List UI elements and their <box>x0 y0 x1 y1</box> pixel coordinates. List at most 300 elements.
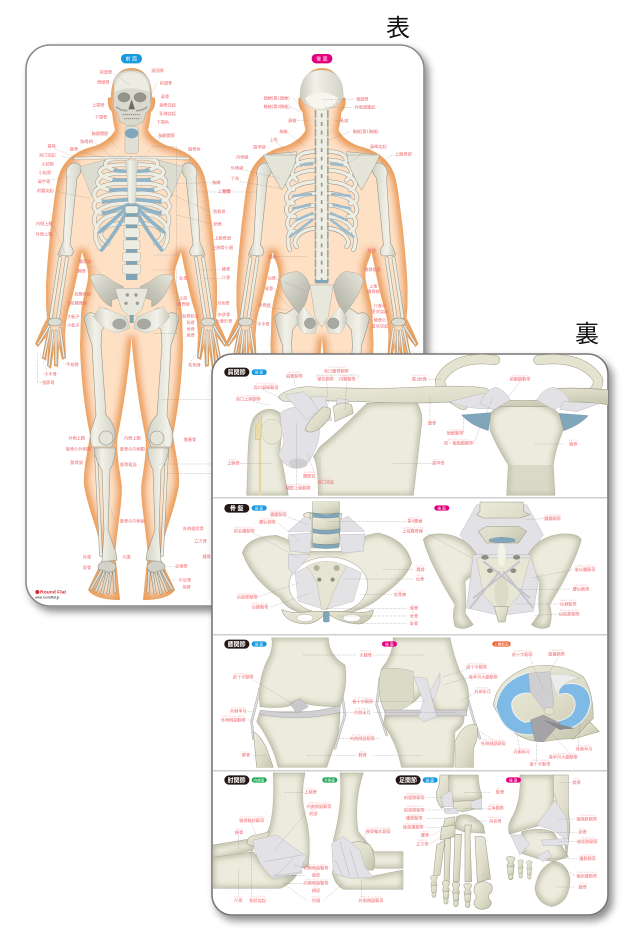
labels: pelvis: だいよんようつい <box>408 515 422 519</box>
label group: anterior view: 乳様突起 <box>159 110 177 116</box>
labels: knee: ひこつ <box>243 749 249 753</box>
label group: anterior view: 大菱形骨 <box>216 318 232 324</box>
heading: 足関節 with badges <box>396 775 521 785</box>
label group: anterior view: 橈骨 <box>222 265 230 271</box>
label group: anterior view: 上前 <box>179 295 187 301</box>
illustration: tibial plateau top view <box>493 665 599 742</box>
labels: pelvis: ちこつ <box>411 618 417 622</box>
labels: knee: だいたいこつ <box>360 649 371 653</box>
labels: knee: こうはんげつだいたいじんたい <box>550 751 576 755</box>
labels: shoulder: 円錐靭帯 <box>339 376 356 382</box>
heading: 肘関節 with badges: 外側面 <box>324 777 335 782</box>
illustration: clavicle <box>278 386 610 407</box>
labels: knee: ないそくはんげつ <box>355 707 370 711</box>
label group: anterior view: 胸鎖関節 <box>158 132 175 138</box>
labels: pelvis: せんきょくじんたい <box>560 598 577 602</box>
heading: back side 裏: 裏 <box>575 321 599 348</box>
label group: anterior view: 大転子 <box>67 313 80 319</box>
illustration: sternum and first ribs <box>440 359 598 496</box>
label group: anterior view: 前腸骨棘 <box>74 290 92 296</box>
labels: pelvis: 腸骨 <box>416 566 425 572</box>
labels: knee: ぜんじゅうじじんたい <box>234 671 253 675</box>
labels: elbow and ankle: 腓骨 <box>572 779 581 785</box>
logo: Round Flat: Round Flat <box>40 590 66 596</box>
labels: elbow and ankle: しょうひじんたい <box>580 853 595 857</box>
heading: front side 表: 表 <box>386 15 410 42</box>
labels: knee: ぜんじゅうじじんたい <box>467 661 486 665</box>
labels: elbow and ankle: ごきょしょうじんたい <box>404 821 423 825</box>
label group: anterior view: 肋骨 <box>213 221 222 227</box>
labels: shoulder: 関節上腕靭帯 <box>286 485 311 491</box>
labels: knee: 前十字靭帯 <box>466 664 487 670</box>
heading: 骨盤 with badges <box>224 504 449 513</box>
labels: pelvis: 仙結節靭帯 <box>559 610 580 616</box>
heading: 骨盤 with badges: 骨 盤 <box>230 504 243 512</box>
labels: pelvis: こうせんちょうじんたい <box>575 564 595 568</box>
labels: elbow and ankle: 橈骨輪状靭帯 <box>366 828 391 834</box>
labels: shoulder: けんこうこつ <box>433 457 444 461</box>
heading: 肘関節 with badges: 肘関節 <box>228 776 246 784</box>
label group: anterior view: 頬骨突起 <box>159 102 177 108</box>
skeleton: posterior limbs <box>227 162 417 354</box>
labels: knee: がいそくそくふくじんたい <box>482 738 504 742</box>
labels: knee: 後半月大腿靭帯 <box>549 754 578 760</box>
labels: pelvis: 尾骨 <box>410 605 418 611</box>
label group: anterior view: 下前腸骨棘 <box>66 300 88 306</box>
labels: shoulder: うこうさこつじんたい <box>327 365 346 369</box>
labels: elbow and ankle: しょうこつ <box>578 881 587 885</box>
labels: elbow and ankle: 橈骨輪状靭帯 <box>239 817 264 823</box>
labels: knee: こうじゅうじじんたい <box>354 696 372 700</box>
label group: lower legs and logo: 脛骨粗面 <box>120 461 137 467</box>
label group: posterior view: 軸椎(第2頚椎) <box>264 103 290 109</box>
label group: anterior view: 下顎角 <box>156 119 169 125</box>
label group: lower legs and logo: 手根骨 <box>66 361 79 367</box>
labels: shoulder: 烏口鎖骨靭帯 <box>324 367 349 373</box>
labels: pelvis <box>234 509 595 626</box>
label group: posterior view: 尾骨 <box>265 285 273 291</box>
labels: pelvis: 後仙腸靭帯 <box>575 566 595 572</box>
heading: 肘関節 with badges <box>224 775 337 785</box>
label group: posterior view: 胸椎 <box>279 128 288 134</box>
label group: posterior view: 乳突 <box>340 117 348 123</box>
label group: anterior view: 下顎骨 <box>95 114 107 120</box>
heading: 肘関節 with badges: 内側面 <box>254 777 265 782</box>
label group: posterior view: 頚椎(第1頚椎) <box>264 94 290 100</box>
label group: posterior view: 茎状突起 <box>372 308 389 314</box>
labels: pelvis: ぜんせんちょうじんたい <box>234 525 255 529</box>
panel: knee joint <box>221 638 599 768</box>
heading: 肩関節 with badge: 肩関節 <box>228 368 246 376</box>
labels: shoulder: えんすいじんたい <box>340 373 355 377</box>
label group: anterior view: 小転子 <box>67 321 80 327</box>
label group: anterior view: 烏口突起 <box>39 151 56 157</box>
label group: anterior view: 胸骨 <box>212 179 221 185</box>
labels: elbow and ankle: 踵腓靭帯 <box>406 815 423 821</box>
labels: elbow and ankle: ぜんぶ <box>311 808 316 812</box>
label group: lower legs and logo: 外果 <box>83 553 91 559</box>
illustration: knee posterior <box>377 638 480 768</box>
labels: elbow and ankle: 後距踵靭帯 <box>576 872 597 878</box>
label group: anterior view: 舟状骨 <box>218 311 230 317</box>
labels: elbow and ankle: 前距腓靭帯 <box>404 806 425 812</box>
label group: anterior view: 上腕骨 <box>218 187 230 193</box>
labels: pelvis: ちょうこつ <box>416 564 425 568</box>
label group: posterior view: 肘頭 <box>367 247 377 253</box>
labels: shoulder: ぜんこうきょうさじんたい <box>448 437 470 441</box>
labels: pelvis: せんけっせつじんたい <box>238 591 257 595</box>
labels: pelvis: 腸腰靭帯 <box>270 511 287 517</box>
labels: elbow and ankle: 後脛腓靭帯 <box>576 815 597 821</box>
labels: knee: 内側半月 <box>513 749 530 755</box>
labels: knee: 後十字靭帯 <box>352 698 373 704</box>
labels: shoulder: 菱形靭帯 <box>317 376 334 382</box>
label group: anterior view: 腸骨棘 <box>177 300 190 306</box>
label group: anterior view: 鼻骨 <box>161 93 169 99</box>
label group: posterior view: 頭椎 <box>288 117 296 123</box>
labels: shoulder: ろくさじんたい <box>449 427 462 431</box>
labels: elbow and ankle: ないそくそくふくじんたい <box>305 877 327 881</box>
label group: anterior view: 腸骨 <box>77 267 86 273</box>
illustration: elbow lateral <box>332 773 403 889</box>
labels: elbow and ankle: こうけいひじんたい <box>578 813 595 817</box>
label group: posterior view: 尺骨の <box>374 302 386 308</box>
label group: anterior view: 坐骨 <box>186 326 195 332</box>
label group: posterior view <box>223 54 412 328</box>
labels: knee: 外側半月 <box>474 688 491 694</box>
labels: elbow and ankle: 前部 <box>309 810 317 816</box>
labels: pelvis: ちょうようじんたい <box>270 509 287 513</box>
illustration: knee anterior <box>252 638 346 768</box>
labels: knee: がいそくそくふくじんたい <box>222 714 244 718</box>
labels: elbow and ankle <box>234 777 598 903</box>
labels: elbow and ankle: こうぶ <box>313 869 319 873</box>
label group: posterior view: 仙骨 <box>267 275 276 281</box>
labels: pelvis: 仙結節靭帯 <box>237 594 258 600</box>
heading: 骨盤 with badges: 前 面 <box>255 505 264 510</box>
labels: knee: 内側側副靭帯 <box>350 735 375 741</box>
labels: elbow and ankle: ちゅうとう <box>311 895 321 899</box>
labels: knee: しつがいじんたい <box>549 648 564 652</box>
label group: lower legs and logo: 脛骨の内側顆 <box>120 446 146 452</box>
labels: elbow and ankle: 上腕骨 <box>304 789 317 795</box>
logo: Round Flat <box>35 590 66 599</box>
labels: elbow and ankle: きょこつ <box>579 826 586 830</box>
labels: knee: 後半月大腿靭帯 <box>469 674 498 680</box>
labels: knee: 膝蓋靭帯 <box>548 650 565 656</box>
heading: 骨盤 with badges: 後 面 <box>437 505 446 510</box>
labels: elbow and ankle: 後距踵靭帯 <box>403 824 424 830</box>
label group: lower legs and logo: 踵骨 <box>202 553 211 559</box>
labels: shoulder: ぜんきょうさじんたい <box>511 373 529 377</box>
labels: elbow and ankle: 内側側副靭帯 <box>307 803 331 809</box>
labels: elbow and ankle: 橈骨 <box>235 829 243 835</box>
label group: lower legs and logo: 外側上顆 <box>68 435 86 441</box>
label group: anterior view: 前鋸突起 <box>37 187 54 193</box>
labels: knee: 脛骨 <box>358 752 367 758</box>
labels: knee: 内側半月 <box>354 709 371 715</box>
label group: anterior view: 胸鎖関節 <box>92 130 108 136</box>
labels: pelvis: 腰仙靭帯 <box>259 519 276 525</box>
labels: elbow and ankle: 距骨 <box>578 829 587 835</box>
labels: pelvis: 第4腰椎 <box>408 518 422 524</box>
label group: anterior view: 肋軟骨 <box>213 208 226 214</box>
label group: anterior view: 外側上顆 <box>36 230 53 236</box>
view badge: 前面: 前 面 <box>126 55 137 62</box>
labels: elbow and ankle: 横部 <box>312 887 320 893</box>
labels: knee: 後十字靭帯 <box>530 760 550 766</box>
labels: shoulder: うこうとっき <box>321 476 332 480</box>
labels: elbow and ankle: がいそくそくふくじんたい <box>360 895 382 899</box>
label group: posterior view: 上角 <box>269 136 278 142</box>
label group: posterior view: 腰椎 <box>268 254 277 260</box>
labels: elbow and ankle: けいこつ <box>496 786 504 790</box>
label group: anterior view: 腸骨稜 <box>79 258 92 264</box>
labels: pelvis: せんきょくじんたい <box>252 601 268 605</box>
label group: lower legs and logo: 中手骨 <box>44 370 57 376</box>
labels: elbow and ankle: こうじょうとっき <box>250 895 265 899</box>
labels: pelvis: 仙骨 <box>416 575 424 581</box>
label group: lower legs and logo: 腓骨頭 <box>70 459 84 465</box>
labels: pelvis: 仙棘靭帯 <box>252 604 268 610</box>
label group: anterior view <box>36 54 234 337</box>
divider: knee / elbow <box>213 770 607 772</box>
label group: lower legs and logo: 有鉤骨 <box>188 362 201 368</box>
illustration: pelvis anterior <box>242 501 412 624</box>
labels: pelvis: 恥骨 <box>410 620 418 626</box>
panel: front sheet card <box>26 45 424 606</box>
label group: posterior view: 上腕骨頭 <box>395 151 412 157</box>
skeleton: anterior torso and skull <box>75 70 188 333</box>
heading: 膝関節 with badges <box>224 640 511 649</box>
label group: lower legs and logo: 内果 <box>122 553 131 559</box>
labels: knee: こうはんげつだいたいじんたい <box>471 671 496 675</box>
label group: posterior view: 内側縁 <box>236 154 249 160</box>
skeleton: anterior limbs <box>38 163 225 593</box>
labels: pelvis: 坐骨棘 <box>394 591 407 597</box>
label group: anterior view: 内側上顆 <box>36 220 53 226</box>
panel: shoulder joint <box>224 359 610 496</box>
labels: shoulder: 胸骨 <box>569 440 577 446</box>
label group: posterior view: 肩甲棘 <box>253 143 266 149</box>
illustration: ligaments <box>285 387 600 432</box>
label group: lower legs and logo: 脛骨の外側顆 <box>66 446 92 452</box>
labels: elbow and ankle: 脛骨 <box>496 789 504 795</box>
label group: anterior view: 仙骨 <box>179 275 187 281</box>
labels: elbow and ankle: 内側側副靭帯 <box>304 880 328 886</box>
label group: anterior view: 胸骨柄 <box>80 138 93 144</box>
label group: anterior view: 月状骨 <box>217 300 230 306</box>
logo: Round Flat: www.roundflat.jp <box>35 595 60 599</box>
label group: posterior view: 橈骨の <box>374 317 386 323</box>
labels: elbow and ankle: ないそくそくふくじんたい <box>308 801 330 805</box>
label group: anterior view: 小結節 <box>39 169 51 175</box>
label group: posterior view: 中手骨 <box>257 320 270 326</box>
labels: knee: がいそくはんげつ <box>577 743 591 747</box>
labels: pelvis: じょうぜんちょうこつきょく <box>401 525 425 529</box>
labels: elbow and ankle: 外側側副靭帯 <box>359 897 383 903</box>
view badge: 前面 <box>121 54 142 63</box>
labels: shoulder: 烏口突起 <box>318 479 335 485</box>
label group: anterior view: 肩峰 <box>47 142 57 148</box>
labels: shoulder: りょうけいじんたい <box>317 373 334 377</box>
label group: lower legs and logo: 中足骨 <box>179 576 191 582</box>
label group: lower legs and logo: 立方骨 <box>194 537 207 543</box>
labels: elbow and ankle: 三角靭帯 <box>487 805 504 811</box>
labels: shoulder: 前・後胸鎖靭帯 <box>444 440 473 446</box>
label group: lower legs and logo: 指節骨 <box>42 379 55 385</box>
label group: posterior view: 胸椎(第1胸椎) <box>353 128 379 134</box>
heading: 肩関節 with badge: 前 面 <box>255 369 264 374</box>
labels: shoulder <box>227 365 578 491</box>
labels: knee: 外側側副靭帯 <box>481 740 506 746</box>
skin silhouette: anterior body <box>35 68 228 600</box>
labels: knee: がいそくはんげつ <box>231 705 246 709</box>
labels: shoulder: 関節包 <box>303 472 316 478</box>
labels: knee: 外側半月 <box>230 708 247 714</box>
view badge: 後面: 後 面 <box>316 55 328 62</box>
illustration: foot dorsal <box>431 775 492 909</box>
labels: shoulder: うこうけんぽうじんたい <box>256 382 276 386</box>
labels: elbow and ankle: 肘頭 <box>312 897 321 903</box>
labels: elbow and ankle: 前脛腓靭帯 <box>404 794 425 800</box>
labels: pelvis: ちょうようじんたい <box>544 513 561 517</box>
illustration: foot posterior <box>507 775 570 907</box>
label group: anterior view: 上顎骨 <box>92 101 105 107</box>
view badge: 後面 <box>312 54 332 63</box>
labels: knee: 外側側副靭帯 <box>221 716 246 722</box>
label group: anterior view: 胸骨体 <box>188 146 201 152</box>
labels: knee: ないそくそくふくじんたい <box>351 733 373 737</box>
labels: pelvis: 上前腸骨棘 <box>402 528 424 534</box>
labels: pelvis: ようせんじんたい <box>574 583 588 587</box>
labels: knee: ないそくはんげつ <box>514 746 529 750</box>
label group: anterior view: 前頭骨 <box>160 80 172 86</box>
label group: lower legs and logo: 指骨 <box>182 583 191 589</box>
labels: knee: 腓骨 <box>242 752 250 758</box>
labels: elbow and ankle: とうこつりんじょうじんたい <box>366 826 390 830</box>
labels: elbow and ankle: こうきょひじんたい <box>579 836 596 840</box>
illustration: humerus and capsule <box>247 407 320 496</box>
labels: elbow and ankle: とうこつ <box>235 827 243 831</box>
label group: lower legs and logo <box>35 353 220 599</box>
labels: elbow and ankle: こうきょしょうじんたい <box>577 870 597 874</box>
labels: knee: 外側半月 <box>576 746 592 752</box>
labels: elbow and ankle: 踵腓靭帯 <box>579 855 596 861</box>
illustration: elbow medial <box>213 773 309 888</box>
panel: pelvis <box>224 501 595 628</box>
labels: elbow and ankle: しょうひじんたい <box>407 812 422 816</box>
label group: posterior view: 茎状突起 <box>372 322 389 328</box>
heading: 膝関節 with badges: 膝関節 <box>228 640 246 648</box>
labels: shoulder: 烏口上腕靭帯 <box>236 396 261 402</box>
labels: elbow and ankle: さんかくじんたい <box>488 802 503 806</box>
labels: elbow and ankle: 後距腓靭帯 <box>577 838 598 844</box>
labels: pelvis: 腸腰靭帯 <box>544 515 561 521</box>
labels: pelvis: ざこつ <box>411 610 417 614</box>
label group: posterior view: 外側縁 <box>231 164 244 170</box>
labels: elbow and ankle: ぜんけいひじんたい <box>406 792 423 796</box>
panel: elbow and ankle joints <box>213 773 598 909</box>
label group: posterior view: 坐骨棘 <box>258 302 271 308</box>
labels: shoulder: 上腕骨 <box>227 460 240 466</box>
panel: back sheet card <box>212 354 610 915</box>
labels: knee: ぜんじゅうじじんたい <box>513 649 532 653</box>
labels: shoulder: かんせつじょうわんじんたい <box>286 482 310 486</box>
labels: elbow and ankle: とうこつりんじょうじんたい <box>240 815 264 819</box>
labels: shoulder: 前胸鎖靭帯 <box>510 376 530 382</box>
label group: anterior view: 尺骨 <box>222 274 230 280</box>
labels: pelvis: 腰仙靭帯 <box>573 585 589 591</box>
label group: posterior view: 腸骨棘 <box>367 288 380 294</box>
labels: pelvis: せんこつ <box>416 573 424 577</box>
label group: lower legs and logo: 外側楔状骨 <box>183 525 204 531</box>
labels: elbow and ankle: 舟状骨 <box>489 817 502 823</box>
label group: anterior view: 側頭骨 <box>97 79 110 85</box>
label group: posterior view: 肩峰突起 <box>370 143 387 149</box>
divider: pelvis / knee <box>213 634 607 636</box>
labels: shoulder: きょうこつ <box>569 438 578 442</box>
label group: lower legs and logo: 膝蓋骨 <box>184 436 196 442</box>
labels: shoulder: けんさじんたい <box>288 370 301 374</box>
heading: 足関節 with badges: 足関節 <box>399 776 417 784</box>
divider: shoulder / pelvis <box>213 497 607 498</box>
label group: posterior view: 外後頭隆起 <box>355 104 376 110</box>
heading: 膝関節 with badges: 後 面 <box>385 641 394 646</box>
label group: anterior view: 恥骨結合 <box>182 312 200 318</box>
labels: elbow and ankle: 立方骨 <box>416 840 429 846</box>
label group: anterior view: 尾骨 <box>186 331 195 337</box>
labels: elbow and ankle: 内側側副靭帯 <box>304 865 328 871</box>
label group: anterior view: 鎖骨 <box>70 145 78 151</box>
label group: anterior view: 肩甲骨 <box>38 178 50 184</box>
labels: knee: 大腿骨 <box>359 651 372 657</box>
labels: shoulder: じょうわんこつ <box>227 457 240 461</box>
label group: posterior view: 肋骨 <box>223 188 231 194</box>
labels: shoulder: 鎖骨 <box>428 420 436 426</box>
labels: pelvis: びこつ <box>411 602 417 606</box>
label group: lower legs and logo: 脛骨の内側面 <box>120 518 145 524</box>
labels: pelvis: 前仙腸靭帯 <box>234 528 255 534</box>
labels: elbow and ankle: じょうわんこつ <box>304 786 317 790</box>
label group: anterior view: 前頭骨 <box>100 69 112 75</box>
labels: elbow and ankle: しょうこつ <box>420 829 430 833</box>
labels: elbow and ankle: ないそくそくふくじんたい <box>305 862 327 866</box>
labels: pelvis: せんけっせつじんたい <box>560 608 579 612</box>
labels: elbow and ankle: ひこつ <box>574 777 580 781</box>
labels: pelvis: ざこつきょく <box>394 589 406 593</box>
labels: knee: 前十字靭帯 <box>233 674 254 680</box>
labels: elbow and ankle: 鉤状突起 <box>249 897 267 903</box>
label group: posterior view: 上後 <box>369 282 378 288</box>
labels: knee: こうじゅうじじんたい <box>531 758 549 762</box>
labels: shoulder: 肋鎖靭帯 <box>447 430 463 436</box>
labels: knee: けいこつ <box>359 749 366 753</box>
heading: 膝関節 with badges: 前 面 <box>255 641 264 646</box>
skin silhouette: posterior body <box>226 68 418 354</box>
labels: shoulder: 肩鎖靭帯 <box>286 372 303 378</box>
heading: 膝関節 with badges: 上関節面 <box>494 641 509 646</box>
labels: elbow and ankle: ぜんきょひじんたい <box>406 804 423 808</box>
label group: posterior view: 下角 <box>231 175 239 181</box>
heading: 肩関節 with badge <box>224 368 267 377</box>
labels: knee <box>221 648 592 766</box>
label group: lower legs and logo: 距骨 <box>83 564 91 570</box>
label group: posterior view: 橈骨結節 <box>364 266 381 272</box>
heading: 足関節 with badges: 前 面 <box>426 777 434 782</box>
label group: lower legs and logo: 内側上顆 <box>124 435 141 441</box>
heading: 足関節 with badges: 後 面 <box>509 777 518 782</box>
